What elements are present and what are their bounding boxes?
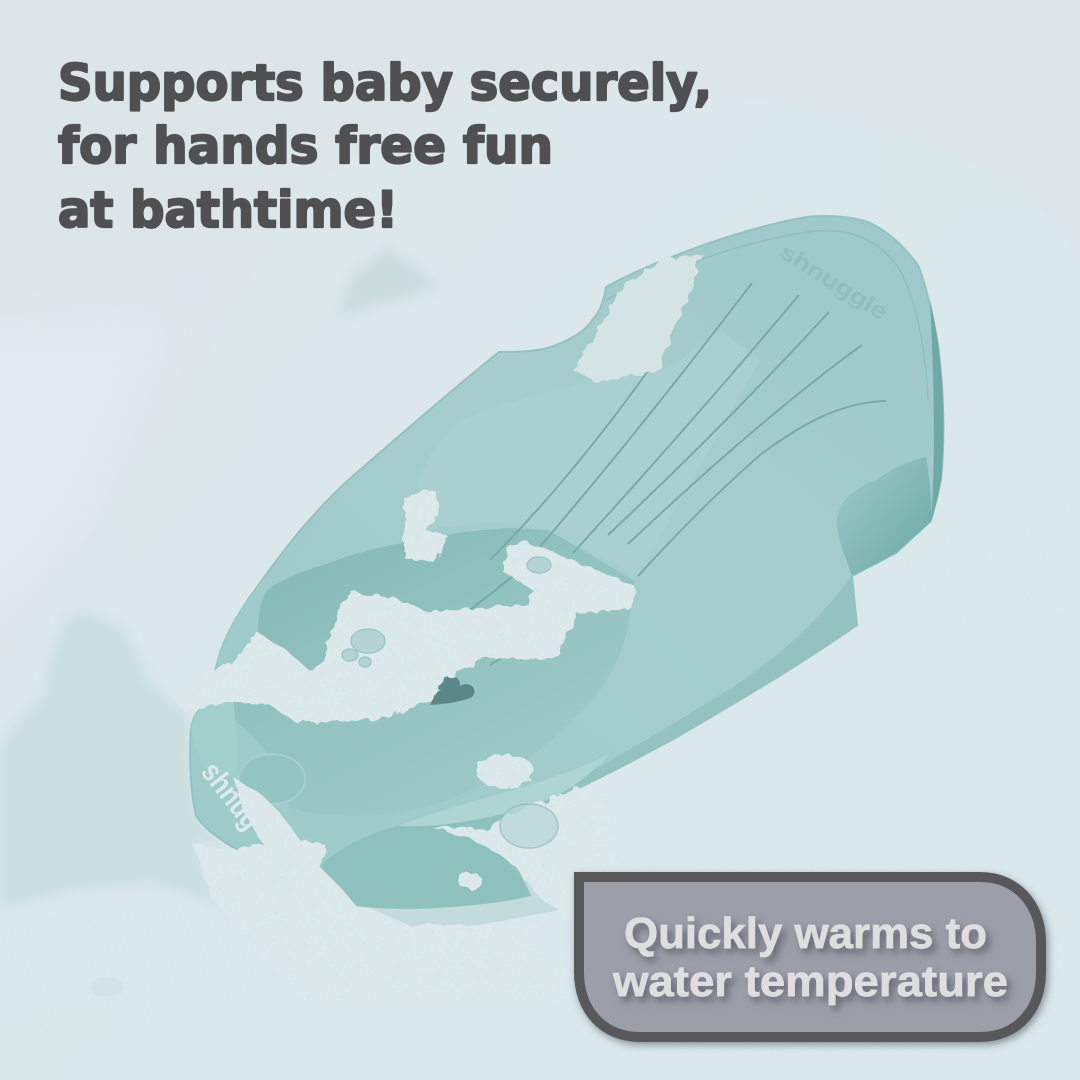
seat lower flank xyxy=(498,576,857,822)
headline xyxy=(58,54,712,239)
front lip xyxy=(398,752,612,826)
headline line 2: for hands free fun xyxy=(58,117,553,175)
water patch upper xyxy=(337,247,440,317)
water strip under flap xyxy=(340,880,560,930)
foam: main band xyxy=(165,542,635,722)
callout box xyxy=(579,877,1041,1037)
bottom drop highlights xyxy=(91,977,123,997)
seat right rim xyxy=(930,300,944,521)
seat body xyxy=(190,216,943,908)
foam: small dot xyxy=(458,873,482,889)
suction cup xyxy=(239,754,305,804)
headline line 1: Supports baby securely, xyxy=(58,54,712,112)
flap inner light area xyxy=(191,702,238,778)
seat bowl xyxy=(234,528,635,816)
tub wall pale glow xyxy=(0,300,190,720)
callout text: water temperature xyxy=(612,957,1008,1006)
foam: bubble cluster on lip xyxy=(476,754,534,788)
callout xyxy=(579,877,1041,1037)
heart cut-out xyxy=(430,676,474,705)
seat side fold xyxy=(837,457,931,576)
water patch left xyxy=(0,611,227,908)
bowl lower water area xyxy=(320,795,540,908)
brand mark bottom: shnug xyxy=(194,756,267,836)
back ribs xyxy=(470,283,886,665)
back panel xyxy=(418,330,760,576)
foam: small centre patch xyxy=(404,489,449,563)
foam: lower left xyxy=(193,778,570,1000)
headline line 3: at bathtime! xyxy=(58,181,398,239)
bath seat xyxy=(190,216,944,908)
brand mark top: shnuggle xyxy=(775,238,893,325)
large water bubbles xyxy=(342,557,558,848)
callout text: Quickly warms to xyxy=(624,909,987,958)
foam: front edge xyxy=(430,780,620,930)
top rim inner line xyxy=(606,231,928,400)
foam: top shoulder xyxy=(572,253,702,383)
callout text xyxy=(612,909,1008,1006)
foam patches on seat xyxy=(165,253,702,1000)
bathtub and foam background xyxy=(0,249,559,997)
upper-left rim highlight xyxy=(217,505,330,667)
